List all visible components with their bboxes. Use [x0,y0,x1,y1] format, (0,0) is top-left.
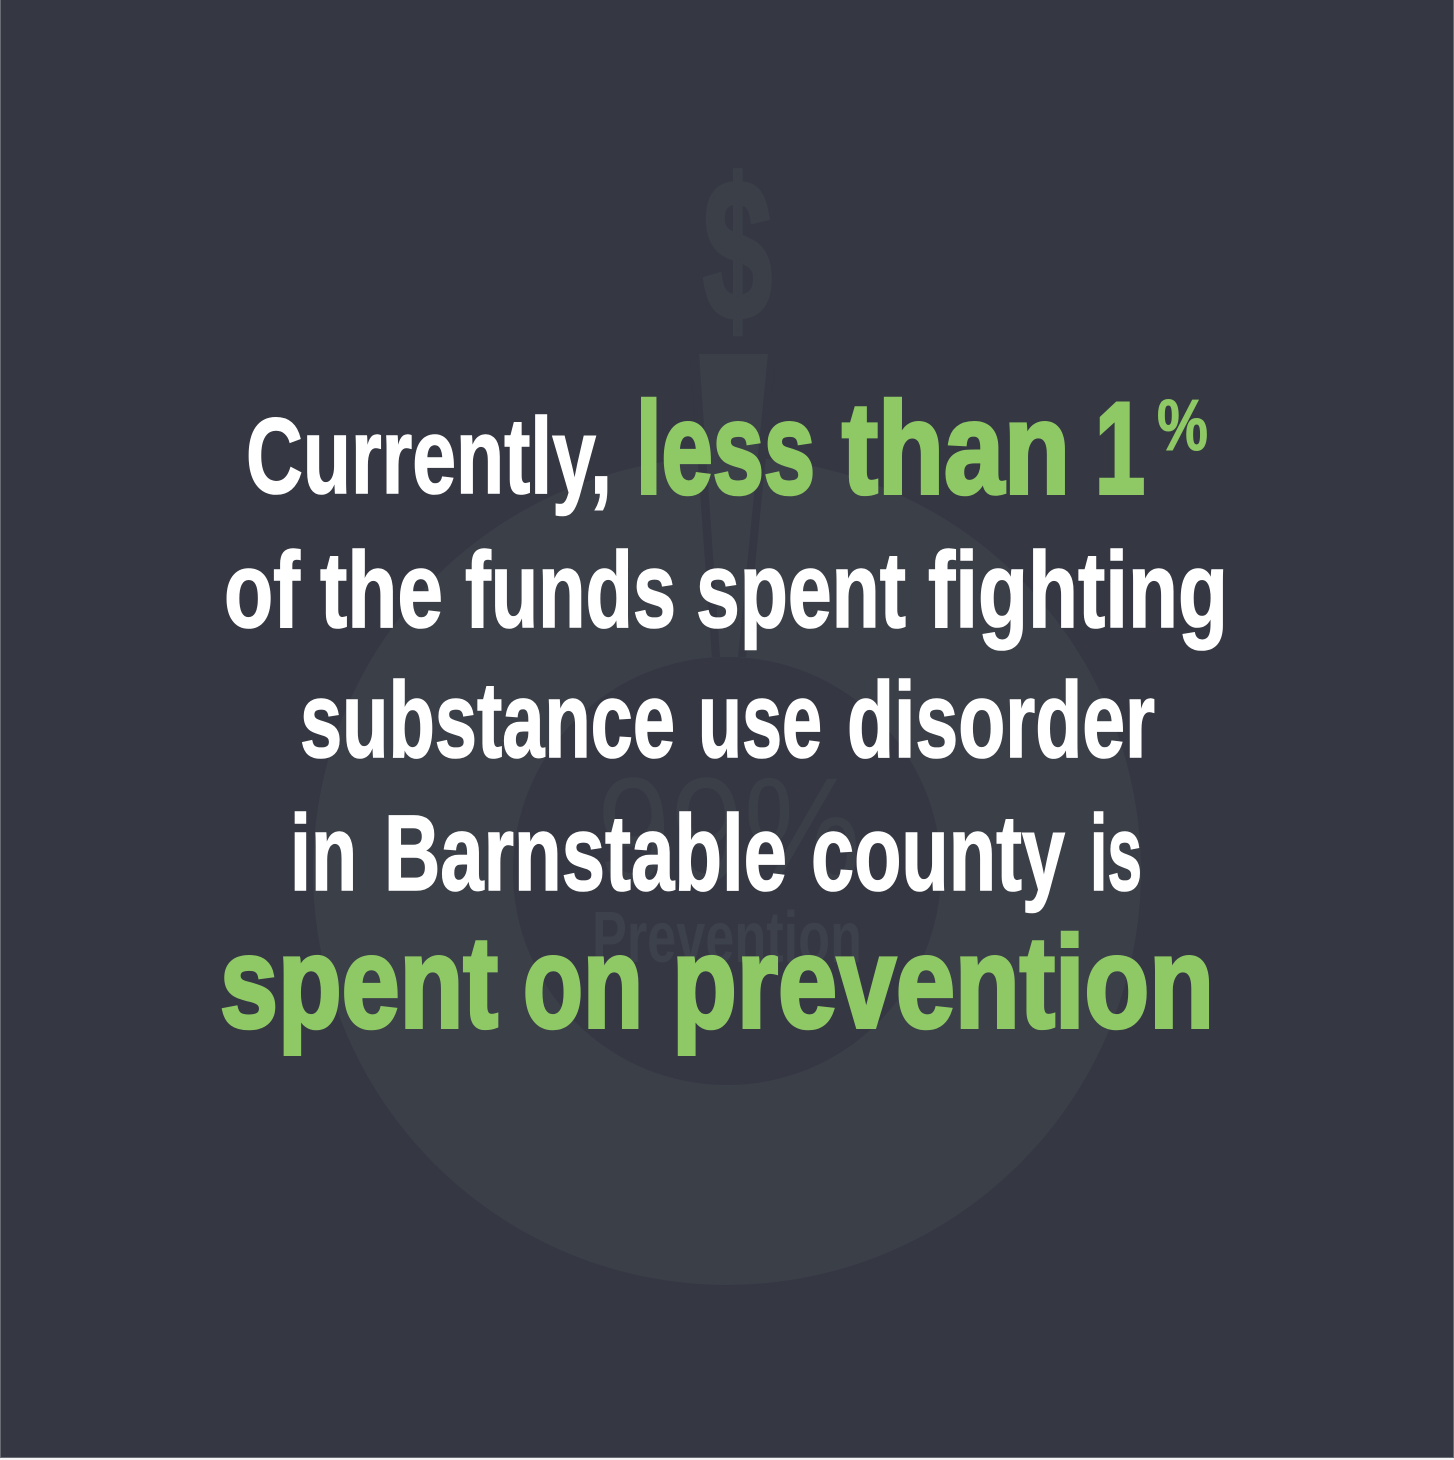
headline text [220,375,1228,1055]
line 3: disorder [847,659,1155,780]
ghost gauge graphic [313,139,1141,1285]
line 5: prevention [672,909,1214,1055]
line 5 [220,909,1214,1055]
line 4: in [290,792,357,913]
line 1: % [1157,386,1208,466]
line 1: less [636,375,815,521]
outer gauge circle [313,457,1141,1285]
line 5: on [523,909,643,1055]
line 4: is [1090,792,1142,913]
line 4: county [811,792,1065,913]
line 2: of [224,529,301,650]
line 1: 1 [1095,375,1145,521]
gauge needle [699,354,768,657]
line 2: funds [465,529,676,650]
ghost label: prevention: Prevention [592,898,862,978]
line 3: use [698,659,822,780]
line 5: spent [220,909,498,1055]
line 1 [246,375,1208,521]
ghost percentage: 99% [597,746,861,914]
inner gauge circle [513,657,941,1085]
line 4: Barnstable [384,792,787,913]
line 4 [290,792,1142,913]
line 1: Currently, [246,395,612,516]
line 2: spent [696,529,906,650]
icon: dollar sign: $ [703,139,772,362]
line 2 [224,529,1228,650]
line 2: fighting [928,529,1228,650]
line 3: substance [300,659,675,780]
line 2: the [320,529,443,650]
line 3 [300,659,1155,780]
gauge needle shadow [690,354,776,657]
line 1: than [842,375,1070,521]
